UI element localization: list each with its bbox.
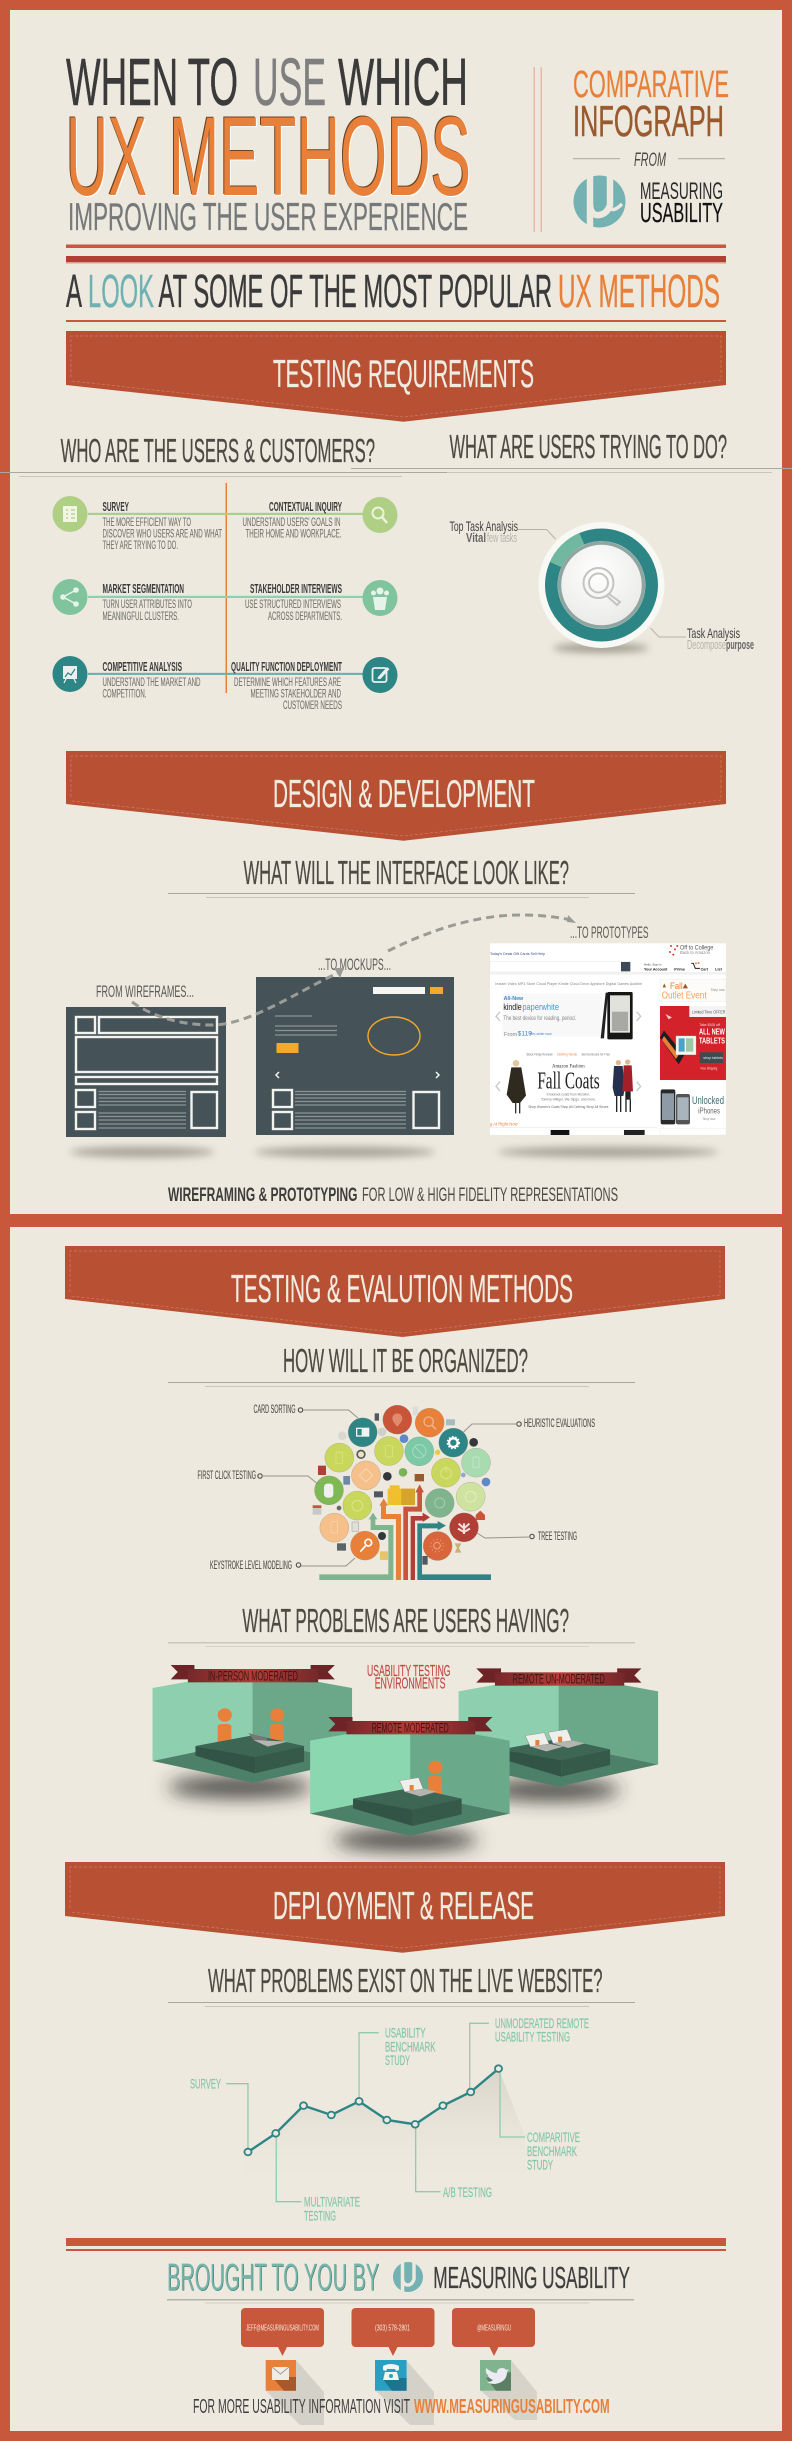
- chart area shadow: [242, 2069, 525, 2190]
- diagram label: USABILITY TESTING: [367, 1663, 450, 1680]
- room: remote un-moderated: [459, 1673, 658, 1787]
- room: in-person moderated: [153, 1670, 352, 1783]
- diagram label: ENVIRONMENTS: [375, 1675, 446, 1692]
- prototype screenshot panel: ...TO PROTOTYPES: [570, 923, 648, 942]
- title line: when to use which: WHEN TO: [66, 45, 238, 120]
- web page screenshot: Prime: [674, 967, 685, 971]
- method: contextual inquiry: THEIR HOME AND WORKPLACE.: [246, 528, 342, 540]
- title line: ux methods: [65, 93, 472, 220]
- method: quality function deployment: QUALITY FUNCTION DEPLOYMENT: [231, 660, 342, 674]
- comparative infograph badge: MEASURING: [640, 178, 723, 205]
- icon: bird: [480, 2360, 511, 2391]
- callout: keystroke level modeling: KEYSTROKE LEVEL MODELING: [210, 1560, 292, 1572]
- label: top task analysis: few tasks: [487, 531, 517, 545]
- title line: ux methods: UX: [67, 95, 148, 220]
- method: market segmentation: TURN USER ATTRIBUTES INTO: [102, 599, 192, 611]
- chart labels: BENCHMARK: [385, 2039, 436, 2054]
- logo: small: [393, 2262, 423, 2292]
- callout: tree testing: [477, 1531, 577, 1543]
- diagram label: [367, 1663, 450, 1692]
- tree diagram: TREE TESTING: [538, 1531, 577, 1543]
- web page screenshot: Free Shipping: [701, 1066, 717, 1070]
- title line: ux methods: UX: [66, 94, 147, 219]
- arrow: wireframes to prototypes: [132, 915, 571, 1025]
- web page screenshot: kindle: [503, 1002, 522, 1012]
- comparative infograph badge: USABILITY: [640, 197, 723, 228]
- method: stakeholder interviews: STAKEHOLDER INTERVIEWS: [250, 582, 342, 596]
- web page screenshot: shop tablets: [703, 1056, 723, 1060]
- banner: design and development: DESIGN & DEVELOPMENT: [273, 773, 535, 816]
- method: market segmentation: MARKET SEGMENTATION: [102, 582, 184, 596]
- chart labels: [190, 2016, 589, 2224]
- method: survey: THEY ARE TRYING TO DO.: [102, 540, 178, 552]
- tagline: A: [66, 265, 82, 317]
- method: survey: DISCOVER WHO USERS ARE AND WHAT: [102, 528, 222, 540]
- ribbon labels: [208, 1668, 605, 1736]
- web page screenshot: Black Friday Reviews: [527, 1052, 553, 1056]
- tagline: LOOK: [88, 265, 154, 317]
- web page screenshot: Shop now: [703, 1117, 716, 1121]
- caption: wireframing and prototyping: [168, 1185, 618, 1206]
- panel: upper section background: [10, 10, 782, 1214]
- logo: measuring usability: [574, 175, 626, 228]
- web page screenshot: List: [715, 967, 723, 971]
- callout: first click testing: FIRST CLICK TESTING: [198, 1470, 256, 1482]
- method: survey: [52, 496, 222, 552]
- circle glyphs: [324, 1413, 479, 1552]
- text: HEURISTIC EVALUATIONS: [524, 1418, 595, 1430]
- label: task analysis: Task Analysis: [687, 625, 740, 641]
- method: stakeholder interviews: ACROSS DEPARTMENTS.: [268, 611, 342, 623]
- tree diagram: [198, 1404, 595, 1580]
- method: survey: THE MORE EFFICIENT WAY TO: [102, 517, 191, 529]
- web page screenshot: paperwhite: [522, 1002, 559, 1012]
- method: stakeholder interviews: [245, 580, 398, 623]
- wireframe panel: FROM WIREFRAMES...: [96, 982, 194, 1001]
- web page screenshot: iPhones: [698, 1105, 720, 1115]
- tree arrows and circles: [313, 1405, 491, 1580]
- web page screenshot: Knockout coats from McGinn,: [547, 1092, 590, 1097]
- line chart: [190, 2016, 589, 2224]
- web page screenshot: Hello. Sign in: [644, 963, 662, 967]
- title line: ux methods: METHODS: [170, 95, 472, 220]
- header rules: [66, 244, 726, 264]
- web page screenshot: ALL NEW: [699, 1028, 725, 1037]
- callout: heuristic evaluations: [464, 1418, 595, 1432]
- web page screenshot: Limited Time OFFER: [692, 1009, 726, 1014]
- callout: card sorting: CARD SORTING: [254, 1404, 296, 1416]
- method: survey: SURVEY: [102, 500, 129, 514]
- banner: design and development: [66, 751, 726, 841]
- method: competitive analysis: [52, 656, 200, 700]
- label: top task analysis: [450, 518, 556, 545]
- icon: telephone: [375, 2360, 407, 2391]
- footer call to action: FOR MORE USABILITY INFORMATION VISIT: [193, 2396, 410, 2418]
- caption: wireframing and prototyping: FOR LOW & HIGH FIDELITY REPRESENTATIONS: [362, 1185, 618, 1206]
- web page screenshot: Today's Deals Gift Cards Sell Help: [490, 952, 545, 956]
- contact: twitter: [452, 2308, 535, 2391]
- web page screenshot: Fall: [670, 981, 683, 991]
- web page screenshot: Take $100 off: [699, 1022, 721, 1027]
- heading: who are the users: WHO ARE THE USERS & CUSTOMERS?: [61, 432, 375, 469]
- web page screenshot: [490, 943, 726, 1135]
- method: quality function deployment: DETERMINE WHICH FEATURES ARE: [234, 677, 341, 689]
- room: remote moderated: [310, 1723, 510, 1836]
- banner: testing requirements: TESTING REQUIREMENTS: [273, 353, 534, 396]
- speech bubble: (303) 578-2801: [375, 2322, 410, 2332]
- mockup panel: [256, 955, 454, 1135]
- prototype screenshot panel: [490, 923, 726, 1135]
- wireframe panel: [66, 982, 226, 1137]
- method: contextual inquiry: UNDERSTAND USERS' GOALS IN: [242, 517, 340, 529]
- comparative infograph badge: FROM: [634, 150, 666, 171]
- title line: ux methods: UX: [65, 93, 146, 218]
- chart labels: STUDY: [527, 2157, 553, 2172]
- panel: lower section background: [10, 1227, 782, 2431]
- web page screenshot: Instant Video MP3 Store Cloud Player Kindle Cloud Drive Appstore Digital Games Audible: [495, 982, 642, 986]
- ribbon labels: REMOTE MODERATED: [372, 1720, 449, 1736]
- footer call to action: WWW.MEASURINGUSABILITY.COM: [414, 2396, 610, 2418]
- banner: testing requirements: [66, 331, 726, 422]
- contact: phone: [352, 2308, 434, 2391]
- footer heading: brought to you by: BROUGHT TO YOU BY: [167, 2257, 379, 2299]
- arrowheads: [334, 915, 576, 978]
- method: quality function deployment: MEETING STAKEHOLDER AND: [250, 688, 341, 700]
- method: market segmentation: MEANINGFUL CLUSTERS.: [102, 611, 179, 623]
- ribbon shapes: [171, 1665, 641, 1734]
- web page screenshot: Back to Amazon: [680, 950, 711, 955]
- title line: when to use which: WHICH: [338, 45, 468, 120]
- web page screenshot: g At Right Now: [490, 1121, 518, 1126]
- donut chart: task analysis: [450, 518, 754, 652]
- method: stakeholder interviews: USE STRUCTURED INTERVIEWS: [245, 599, 341, 611]
- method: contextual inquiry: CONTEXTUAL INQUIRY: [269, 500, 342, 514]
- contact: email: [241, 2308, 324, 2391]
- chart labels: TESTING: [304, 2209, 336, 2224]
- data points: [244, 2065, 502, 2155]
- data line: [248, 2069, 498, 2152]
- room floor shadows: [168, 1776, 620, 1851]
- web page screenshot: Outlet Event: [662, 990, 707, 1001]
- chart labels: BENCHMARK: [527, 2144, 577, 2159]
- subtitle: IMPROVING THE USER EXPERIENCE: [68, 196, 468, 239]
- panel: user research methods: [52, 483, 398, 712]
- speech bubble: JEFF@MEASURINGUSABILITY.COM: [246, 2322, 319, 2332]
- panel shadows: [70, 1146, 718, 1158]
- web page screenshot: Shop Women's Coats Shop All Clothing Shop All Shoes: [528, 1105, 608, 1109]
- leader lines: [226, 2023, 525, 2202]
- title block: [65, 45, 472, 239]
- method: competitive analysis: COMPETITIVE ANALYSIS: [102, 660, 182, 674]
- web page screenshot: Cart: [701, 967, 709, 971]
- chart labels: A/B TESTING: [443, 2185, 492, 2200]
- ribbon labels: REMOTE UN-MODERATED: [513, 1672, 605, 1686]
- mockup panel: ...TO MOCKUPS...: [318, 955, 391, 974]
- method: competitive analysis: UNDERSTAND THE MARKET AND: [102, 677, 200, 689]
- chart labels: UNMODERATED REMOTE: [495, 2016, 589, 2031]
- web page screenshot: TABLETS: [699, 1036, 725, 1045]
- method: market segmentation: [52, 579, 192, 623]
- chart labels: USABILITY: [385, 2025, 426, 2040]
- icon: magnifier: [584, 568, 620, 605]
- header divider: [534, 67, 542, 232]
- web page screenshot: Off to College: [680, 944, 714, 951]
- title line: ux methods: METHODS: [169, 94, 471, 219]
- method: quality function deployment: CUSTOMER NEEDS: [283, 700, 342, 712]
- method: quality function deployment: [231, 657, 398, 712]
- web page screenshot: From: [504, 1032, 517, 1038]
- caption: wireframing and prototyping: WIREFRAMING & PROTOTYPING: [168, 1185, 358, 1206]
- speech bubble: @MEASURINGU: [477, 2322, 511, 2332]
- icon: envelope: [266, 2360, 296, 2391]
- label: task analysis: purpose: [726, 638, 754, 652]
- banner: deployment and release: [65, 1862, 725, 1953]
- title line: ux methods: METHODS: [168, 93, 470, 218]
- web page screenshot: Shop now: [711, 988, 725, 992]
- web page screenshot: Your Account: [644, 967, 668, 971]
- chart labels: MULTIVARIATE: [304, 2195, 360, 2210]
- label: task analysis: Decompose: [687, 638, 726, 652]
- banner: deployment and release: DEPLOYMENT & RELEASE: [273, 1885, 534, 1928]
- method: contextual inquiry: [242, 497, 398, 540]
- label: top task analysis: Vital: [466, 531, 486, 545]
- label: task analysis: [650, 625, 754, 652]
- usability testing environments: [153, 1663, 658, 1851]
- web page screenshot: Clothing Trends: [557, 1052, 577, 1056]
- chart labels: USABILITY TESTING: [495, 2030, 570, 2045]
- web page screenshot: Borrow Books for Free: [582, 1052, 610, 1056]
- small scattered icons: [313, 1407, 490, 1565]
- footer heading: brought to you by: MEASURING USABILITY: [433, 2260, 630, 2295]
- web page screenshot: Tommy Hilfiger, We Sipgo, and more.: [541, 1097, 596, 1102]
- fashion models: [507, 1059, 633, 1113]
- method: competitive analysis: COMPETITION.: [102, 688, 146, 700]
- contact shadows: [266, 2360, 537, 2425]
- title line: when to use which: USE: [253, 45, 326, 120]
- web page screenshot: Amazon Fashion: [552, 1063, 585, 1069]
- chart labels: SURVEY: [190, 2077, 221, 2092]
- web page screenshot: Unlocked: [692, 1095, 724, 1107]
- footer heading: brought to you by: BROUGHT TO YOU BY: [168, 2258, 380, 2300]
- heading: how will it be organized: HOW WILL IT BE ORGANIZED?: [283, 1342, 528, 1379]
- label: top task analysis: Top Task Analysis: [450, 518, 518, 534]
- banner: testing and evaluation methods: [65, 1246, 725, 1337]
- web page screenshot: The best device for reading, period.: [503, 1016, 576, 1022]
- web page screenshot: All-New: [504, 996, 524, 1002]
- icon: folder: [388, 1485, 415, 1505]
- chart labels: COMPARITIVE: [527, 2130, 580, 2145]
- web page screenshot: $119: [518, 1030, 532, 1037]
- web page screenshot: Fall Coats: [537, 1069, 600, 1095]
- comparative infograph badge: [573, 64, 729, 228]
- chart labels: STUDY: [385, 2053, 410, 2068]
- footer rules: [66, 2238, 726, 2251]
- ribbon labels: IN-PERSON MODERATED: [208, 1668, 298, 1684]
- web page screenshot: Pre-order now: [530, 1032, 552, 1036]
